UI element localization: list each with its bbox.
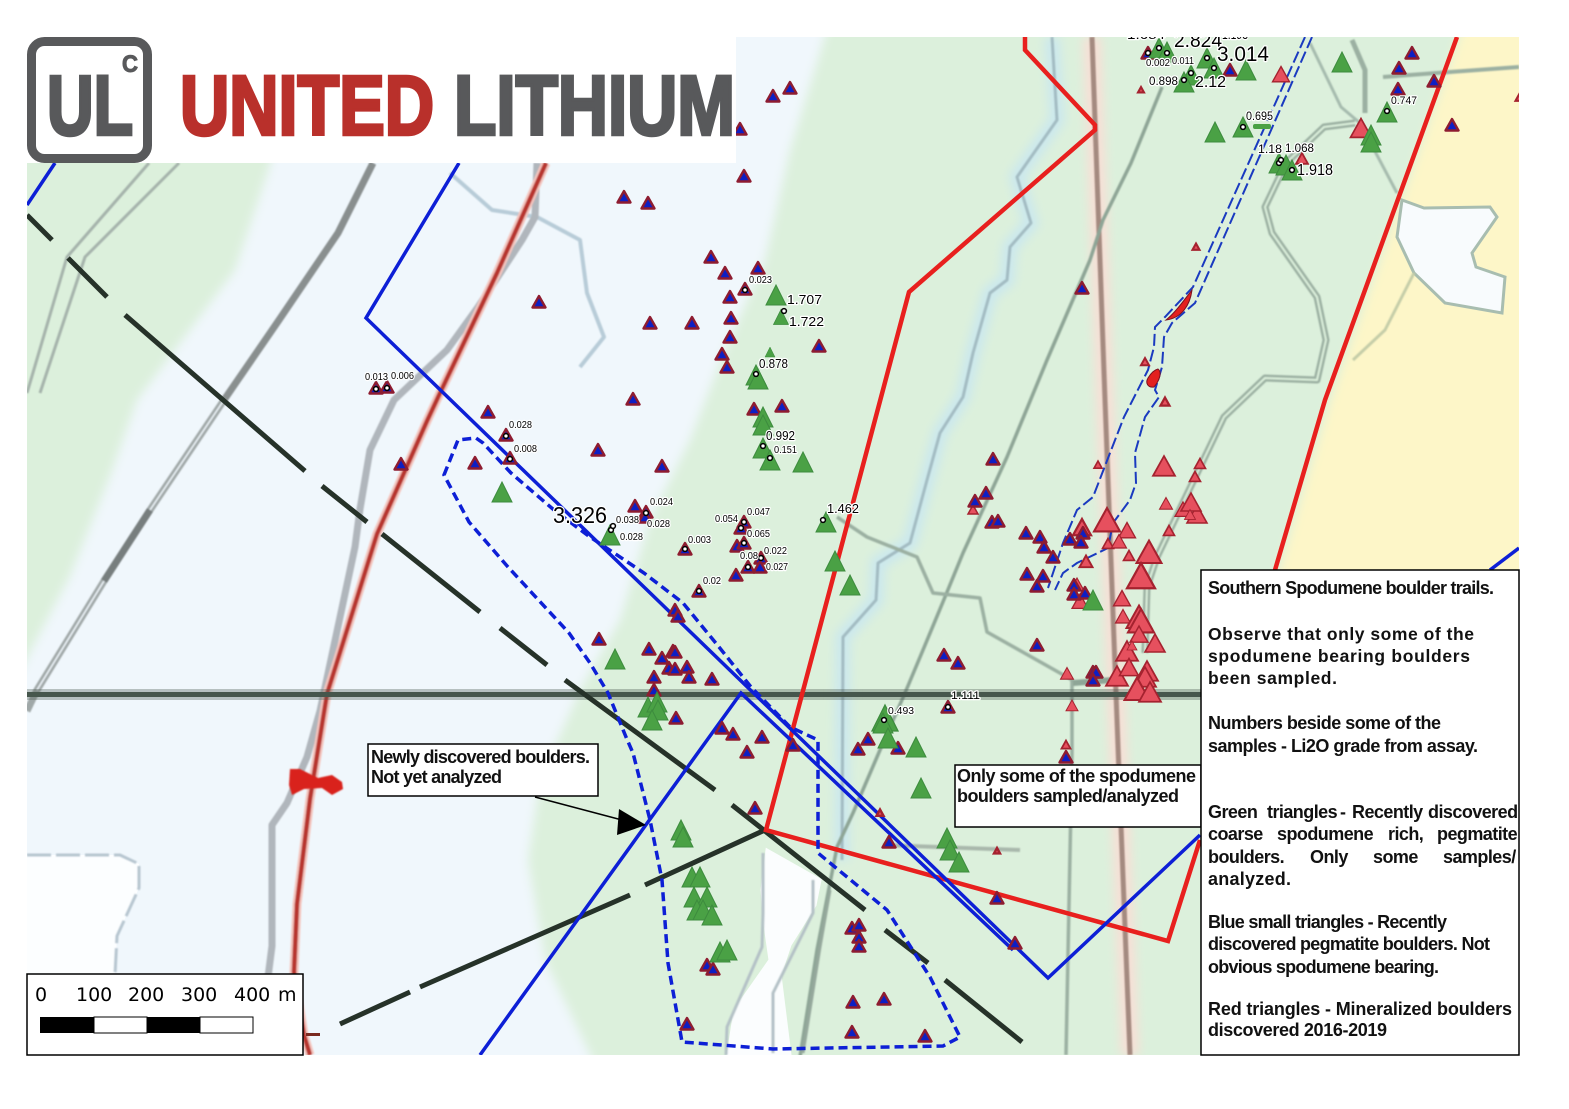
Li2O grade labels: 0.023	[749, 275, 772, 286]
green triangles	[492, 38, 1397, 962]
Li2O grade labels: 0.054	[715, 514, 738, 525]
Li2O grade labels: 0.047	[747, 507, 770, 518]
red claim boundaries	[766, 37, 1457, 941]
Li2O grade labels: 0.898	[1149, 76, 1178, 88]
Li2O grade labels: 1.111	[951, 690, 980, 702]
note: blue triangles: Blue small triangles - Recently	[1208, 912, 1447, 932]
Li2O grade labels: 0.747	[1391, 95, 1417, 107]
note: numbers	[1208, 713, 1478, 756]
icon: red road marker	[289, 769, 343, 1036]
scale bar	[27, 974, 303, 1055]
Li2O grade labels: 0.695	[1246, 111, 1273, 123]
wordmark: UNITED	[180, 58, 434, 152]
Li2O grade labels: 0.992	[766, 428, 795, 443]
Li2O grade labels: 1.684	[1127, 27, 1165, 42]
wordmark	[180, 58, 735, 152]
sample markers	[374, 46, 1389, 722]
blue dashed trail north	[1048, 37, 1312, 590]
Li2O grade labels: 0.038	[616, 515, 639, 526]
note: green triangles	[1208, 802, 1518, 889]
note: green triangles: Recently	[1352, 802, 1423, 822]
Li2O grade labels: 0.006	[391, 371, 414, 382]
Li2O grade labels: 2.824	[1174, 31, 1222, 52]
note: green triangles: some	[1373, 847, 1418, 867]
Li2O grade labels: 0.493	[888, 705, 914, 717]
note: sampling	[1208, 624, 1474, 688]
Li2O grade labels: 0.024	[650, 497, 673, 508]
Li2O grade labels: 0.008	[514, 444, 537, 455]
note: green triangles: discovered	[1428, 802, 1518, 822]
note: numbers: samples - Li2O grade from assay.	[1208, 736, 1478, 756]
Li2O grade labels: 0.027	[766, 562, 788, 573]
note: green triangles: triangles	[1267, 802, 1338, 822]
Li2O grade labels: 0.02	[703, 576, 721, 587]
callout: sampled boulders: Only some of the spodumene	[957, 766, 1196, 786]
Li2O grade labels: 0.003	[688, 535, 711, 546]
note: green triangles: analyzed.	[1208, 869, 1291, 889]
red mineralized outcrops	[1147, 290, 1192, 387]
scale bar: 200	[128, 984, 164, 1006]
icon: UL badge: UL	[47, 58, 133, 152]
horizontal power line	[27, 689, 1207, 700]
note: green triangles: spodumene	[1277, 824, 1374, 844]
note: red triangles	[1208, 999, 1512, 1040]
wordmark: LITHIUM	[454, 58, 735, 152]
note: sampling: Observe that only some of the	[1208, 624, 1474, 644]
note: sampling: spodumene bearing boulders	[1208, 646, 1470, 666]
Li2O grade labels: 0.013	[365, 372, 388, 383]
note: red triangles: Red triangles - Mineralized boulders	[1208, 999, 1512, 1019]
Li2O grade labels: 1.722	[789, 314, 824, 329]
note: red triangles: discovered 2016-2019	[1208, 1020, 1387, 1040]
Li2O grade labels: 0.022	[764, 546, 787, 557]
Li2O grade labels: 1.707	[787, 292, 822, 307]
icon: UL badge: C	[122, 51, 138, 78]
thick grey road	[224, 163, 373, 400]
note: blue triangles	[1208, 912, 1490, 977]
Li2O grade labels: 0.151	[774, 445, 797, 456]
note: green triangles: coarse	[1208, 824, 1263, 844]
scale bar: 300	[181, 984, 217, 1006]
arrow: to new boulders	[535, 797, 646, 835]
Li2O grade labels: 0.028	[647, 519, 670, 530]
note: sampling: been sampled.	[1208, 668, 1337, 688]
note: green triangles: samples/	[1443, 847, 1516, 867]
Li2O grade labels: 1.462	[827, 501, 859, 516]
Li2O grade labels: 3.326	[553, 502, 607, 528]
note: green triangles: rich,	[1388, 824, 1423, 844]
scale bar: 400	[234, 984, 270, 1006]
icon: UL badge	[32, 42, 148, 158]
heading: boulder trails: Southern Spodumene boulder trails.	[1208, 578, 1494, 598]
Li2O grade labels: 0.028	[509, 420, 532, 431]
Li2O grade labels: 2.12	[1195, 74, 1226, 91]
blue solid boundaries	[27, 163, 1519, 1055]
note: numbers: Numbers beside some of the	[1208, 713, 1441, 733]
note: green triangles: pegmatite	[1437, 824, 1518, 844]
Li2O grade labels: 0.08	[740, 551, 758, 562]
note: blue triangles: discovered pegmatite boulders. Not	[1208, 934, 1490, 954]
scale bar: 0	[35, 984, 47, 1006]
note: green triangles: boulders.	[1208, 847, 1284, 867]
Li2O grade labels: 1.918	[1297, 162, 1333, 179]
lake southwest	[27, 855, 139, 975]
logo: United Lithium	[27, 37, 736, 163]
Li2O grade labels	[365, 27, 1417, 717]
Li2O grade labels: 0.028	[620, 532, 643, 543]
Li2O grade labels: 0.011	[1172, 56, 1194, 67]
blue dashed trail outline	[444, 438, 960, 1049]
blue small triangles	[370, 47, 1458, 1042]
scale bar: m	[278, 984, 297, 1006]
Li2O grade labels: 0.878	[759, 356, 788, 371]
note: green triangles: Only	[1310, 847, 1348, 867]
Li2O grade labels: 0.065	[747, 529, 770, 540]
Li2O grade labels: 3.014	[1217, 43, 1269, 66]
Li2O grade labels: 0.002	[1146, 58, 1170, 69]
scale bar: 100	[76, 984, 112, 1006]
callout: sampled boulders: boulders sampled/analyzed	[957, 786, 1179, 806]
Li2O grade labels: 1.068	[1285, 143, 1314, 155]
callout: sampled boulders	[955, 765, 1201, 827]
black dashed road	[27, 215, 1022, 1042]
red triangles	[876, 66, 1522, 853]
panel: legend notes	[1201, 570, 1519, 1055]
Li2O grade labels: 1.18	[1258, 144, 1282, 156]
lake east	[1397, 200, 1505, 313]
lake south	[728, 850, 820, 1055]
note: green triangles: Green	[1208, 802, 1257, 822]
note: green triangles: -	[1340, 802, 1346, 822]
callout: newly discovered boulders: Newly discovered boulders.	[371, 747, 590, 767]
Li2O grade labels: 1.193	[1222, 27, 1248, 42]
note: blue triangles: obvious spodumene bearing.	[1208, 957, 1439, 977]
callout: newly discovered boulders: Not yet analyzed	[371, 767, 502, 787]
callout: newly discovered boulders	[368, 744, 598, 796]
